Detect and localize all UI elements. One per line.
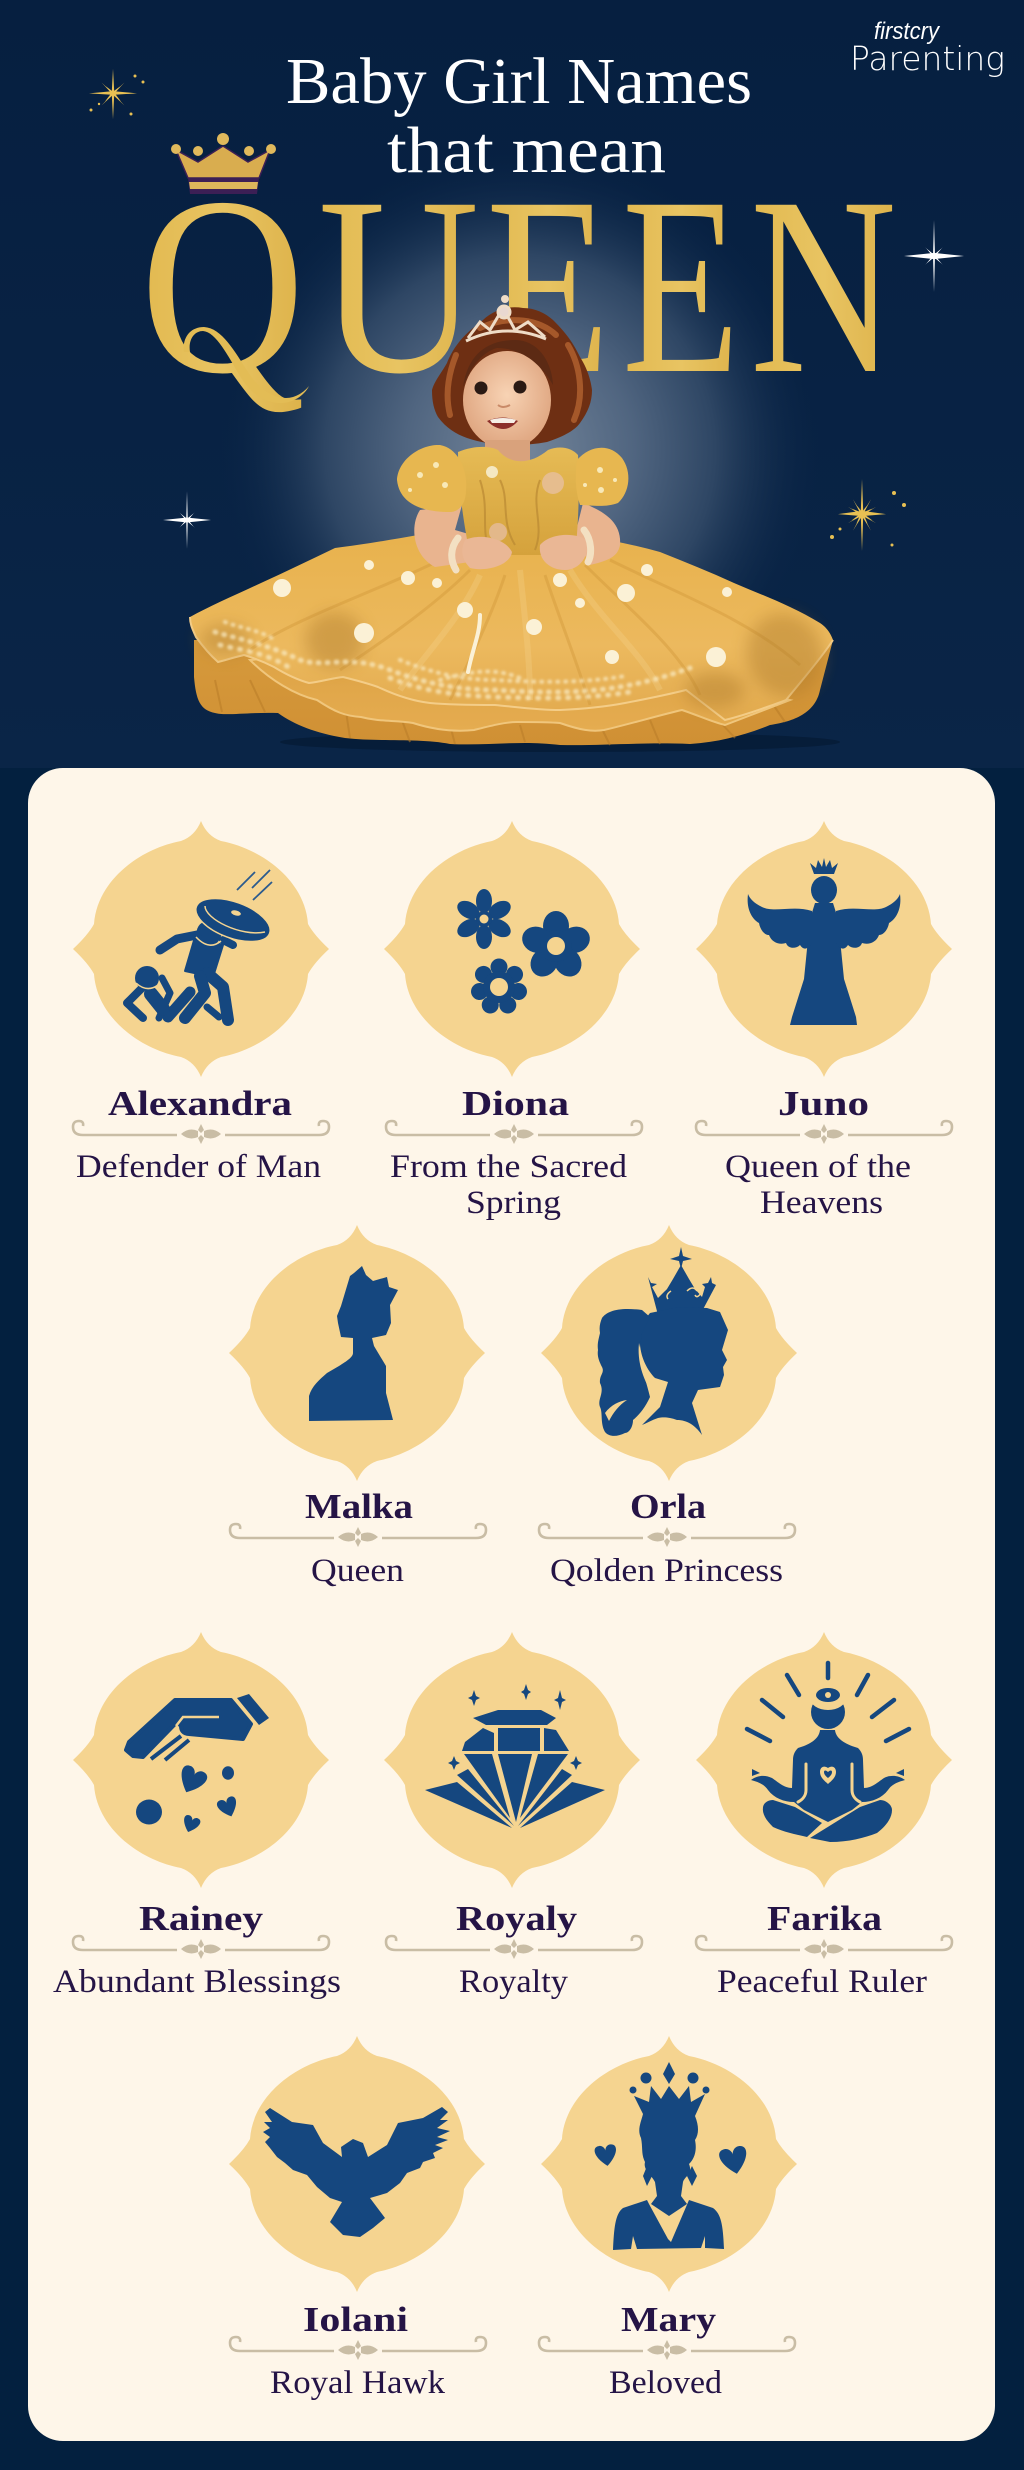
badge [696,1632,952,1888]
icon: angel queen [748,858,900,1025]
meaning: Qolden Princess [550,1553,783,1589]
title [286,45,752,187]
eyes and mouth [474,380,526,429]
card: Royaly [384,1632,642,2000]
hair [432,307,592,445]
fringe [463,340,553,387]
name: Diona [462,1084,569,1123]
bodice [458,447,579,555]
ornament [73,1121,329,1144]
big word QUEEN: Q [140,146,305,427]
icon: diamond [425,1684,605,1828]
card: Rainey [53,1632,341,2000]
meaning: Queen [311,1553,404,1589]
badge [73,821,329,1077]
tiara [466,296,546,341]
meaning [390,1149,628,1221]
neck [485,440,530,462]
ornament [73,1936,329,1959]
name: Mary [621,2300,717,2339]
icon: queen bust silhouette [309,1266,398,1421]
badge [541,2036,797,2292]
name: Iolani [303,2300,408,2339]
badge [384,1632,640,1888]
hero backdrop [0,0,1024,768]
title: Baby Girl Names [286,45,752,118]
skirt [190,535,833,720]
rosette [542,472,564,494]
big word QUEEN [140,145,897,427]
card: Farika [696,1632,952,2000]
meaning: Heavens [760,1185,883,1221]
ornament [696,1121,952,1144]
name: Royaly [456,1899,578,1938]
face [463,351,551,449]
meaning: Abundant Blessings [53,1964,341,2000]
big word QUEEN: U [318,145,479,426]
meaning: Spring [466,1185,561,1221]
name: Orla [630,1487,706,1526]
icon: crowned woman with hearts [594,2062,750,2250]
icon: meditating figure [747,1663,909,1842]
ornament [230,1524,486,1547]
skirt hem line [190,617,833,720]
ornament [386,1936,642,1959]
icon: blessing hand with hearts [126,1694,269,1835]
skirt folds [250,560,800,705]
name: Rainey [139,1899,264,1938]
icon: flowers [454,889,593,1016]
card: Malka [229,1225,486,1589]
badge [229,1225,485,1481]
big word QUEEN: E [486,145,610,426]
card: Alexandra [73,821,329,1185]
badge [696,821,952,1077]
card: Juno [696,821,952,1221]
ornament [539,2337,795,2360]
badge [384,821,640,1077]
big word QUEEN: E [622,145,740,426]
ornament [696,1936,952,1959]
badge [229,2036,485,2292]
baby girl illustration [190,296,840,752]
logo [850,18,1005,78]
name: Juno [778,1084,869,1123]
name: Malka [305,1487,413,1526]
meaning: Queen of the [725,1149,911,1185]
lower tulle layer [194,640,833,745]
middle tulle layer [250,640,790,731]
sleeve pearls [408,462,617,493]
tulle pleats [215,680,785,745]
icon: gold sparkle right [830,479,906,551]
meaning: Royal Hawk [270,2365,446,2401]
hem flowers [273,560,732,667]
ornament [386,1121,642,1144]
icon: gold sparkle top left [89,69,144,119]
name: Alexandra [108,1084,292,1123]
arms [414,505,472,567]
icon: hawk [263,2107,450,2237]
badge [541,1225,797,1481]
icon: shield defender [127,870,276,1020]
gown shadow [280,732,840,752]
logo: Parenting [850,39,1005,78]
card: Mary [539,2036,797,2401]
meaning [725,1149,911,1221]
hands and bracelets [452,530,591,570]
logo: firstcry [874,18,941,45]
meaning: Peaceful Ruler [717,1964,927,2000]
meaning: From the Sacred [390,1149,628,1185]
panel: names card [28,768,995,2441]
icon: white sparkle left [163,491,211,549]
ornament [539,1524,795,1547]
icon: princess profile silhouette [598,1247,728,1436]
name: Farika [767,1899,882,1938]
lace hem band [215,622,690,698]
puff sleeves [397,445,466,512]
big word QUEEN: N [750,145,897,426]
backdrop glow [220,150,820,750]
badge [73,1632,329,1888]
ornament [230,2337,486,2360]
card: Orla [539,1225,797,1589]
card: Iolani [229,2036,486,2401]
icon: crown [171,133,276,194]
embroidery shading [199,603,835,708]
icon: white sparkle right [904,220,964,292]
card: Diona [384,821,642,1221]
meaning: Defender of Man [76,1149,321,1185]
title: that mean [387,114,666,187]
meaning: Royalty [459,1964,569,2000]
meaning: Beloved [609,2365,723,2401]
